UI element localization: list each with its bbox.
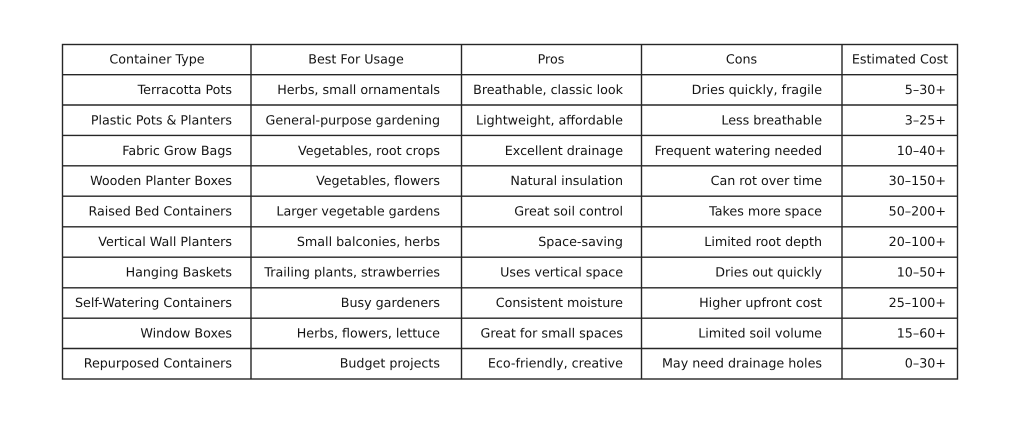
row: Repurposed Containers: 0–30+: [905, 356, 946, 371]
row: Terracotta Pots: Dries quickly, fragile: [692, 82, 822, 97]
row: Hanging Baskets: Hanging Baskets: [126, 264, 232, 280]
row: Repurposed Containers: Repurposed Containers: [84, 356, 232, 371]
row: Window Boxes: Herbs, flowers, lettuce: [297, 325, 440, 340]
row: Hanging Baskets: Trailing plants, strawberries: [263, 264, 440, 280]
row: Hanging Baskets: 10–50+: [897, 264, 946, 280]
row: Fabric Grow Bags: Vegetables, root crops: [298, 143, 440, 158]
header row: Best For Usage: [308, 52, 404, 67]
row: Plastic Pots & Planters: Plastic Pots & Planters: [91, 112, 232, 127]
row: Plastic Pots & Planters: Lightweight, affordable: [476, 112, 623, 127]
row: Terracotta Pots: Terracotta Pots: [137, 82, 232, 97]
row: Repurposed Containers: [84, 356, 946, 371]
row: Wooden Planter Boxes: Vegetables, flowers: [316, 173, 440, 188]
row: Raised Bed Containers: Great soil control: [514, 204, 623, 219]
row: Wooden Planter Boxes: 30–150+: [889, 173, 946, 188]
row: Repurposed Containers: Eco-friendly, creative: [488, 356, 623, 371]
row: Terracotta Pots: Herbs, small ornamentals: [277, 82, 440, 97]
row: Fabric Grow Bags: [122, 143, 946, 158]
row: Raised Bed Containers: Takes more space: [708, 204, 822, 219]
row: Wooden Planter Boxes: Wooden Planter Boxes: [90, 173, 232, 188]
row: Fabric Grow Bags: Frequent watering needed: [655, 143, 822, 158]
row: Repurposed Containers: Budget projects: [340, 356, 440, 371]
row: Self-Watering Containers: Busy gardeners: [341, 295, 440, 310]
row: Self-Watering Containers: Consistent moisture: [496, 295, 623, 310]
row: Plastic Pots & Planters: [91, 112, 946, 127]
row: Wooden Planter Boxes: Can rot over time: [711, 173, 822, 188]
row: Terracotta Pots: 5–30+: [905, 82, 946, 97]
row: Vertical Wall Planters: Small balconies, herbs: [297, 234, 440, 249]
row: Plastic Pots & Planters: 3–25+: [905, 112, 946, 127]
row: Hanging Baskets: Dries out quickly: [715, 264, 822, 280]
row: Window Boxes: [140, 325, 946, 340]
header row: Estimated Cost: [852, 52, 948, 67]
row: Plastic Pots & Planters: General-purpose gardening: [266, 112, 440, 127]
row: Raised Bed Containers: [88, 204, 946, 219]
row: Hanging Baskets: Uses vertical space: [500, 264, 623, 280]
row: Vertical Wall Planters: Space-saving: [538, 234, 623, 249]
header row: Pros: [538, 52, 564, 67]
row: Window Boxes: 15–60+: [897, 325, 946, 340]
row: Self-Watering Containers: Higher upfront cost: [699, 295, 822, 310]
row: Repurposed Containers: May need drainage holes: [662, 356, 822, 371]
row: Self-Watering Containers: [75, 295, 946, 310]
row: Terracotta Pots: [137, 82, 946, 97]
row: Raised Bed Containers: 50–200+: [889, 204, 946, 219]
row: Fabric Grow Bags: Excellent drainage: [505, 143, 623, 158]
header row: Container Type: [109, 52, 205, 67]
row: Window Boxes: Great for small spaces: [480, 325, 623, 340]
row: Wooden Planter Boxes: [90, 173, 946, 188]
row: Fabric Grow Bags: Fabric Grow Bags: [122, 143, 232, 158]
row: Self-Watering Containers: Self-Watering Containers: [75, 295, 232, 310]
header row: Cons: [726, 52, 757, 67]
row: Vertical Wall Planters: Limited root depth: [704, 234, 822, 249]
row: Raised Bed Containers: Raised Bed Containers: [88, 204, 232, 219]
row: Fabric Grow Bags: 10–40+: [897, 143, 946, 158]
row: Plastic Pots & Planters: Less breathable: [721, 112, 822, 127]
row: Wooden Planter Boxes: Natural insulation: [510, 173, 623, 188]
row: Raised Bed Containers: Larger vegetable gardens: [276, 204, 440, 219]
row: Window Boxes: Window Boxes: [140, 325, 232, 340]
row: Window Boxes: Limited soil volume: [698, 325, 822, 340]
row: Vertical Wall Planters: Vertical Wall Planters: [98, 234, 232, 249]
header row: [109, 52, 948, 67]
row: Terracotta Pots: Breathable, classic look: [473, 82, 624, 97]
row: Vertical Wall Planters: 20–100+: [889, 234, 946, 249]
row: Vertical Wall Planters: [98, 234, 946, 249]
row: Hanging Baskets: [126, 264, 946, 280]
row: Self-Watering Containers: 25–100+: [889, 295, 946, 310]
